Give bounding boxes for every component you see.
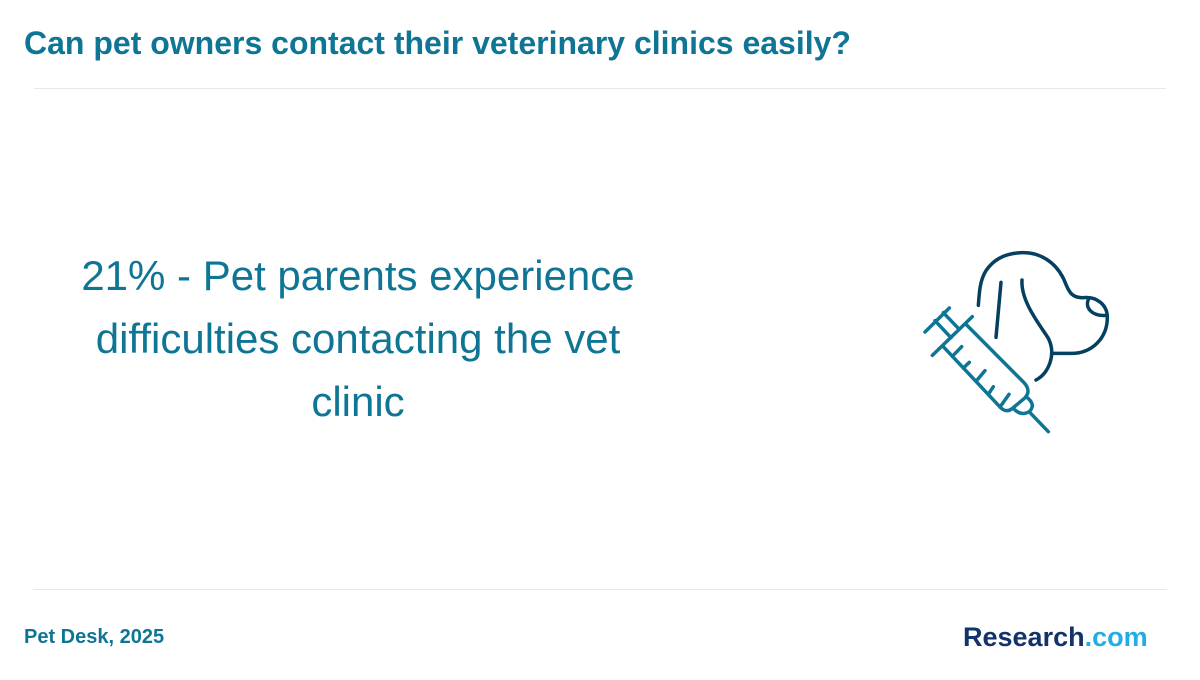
icon part: dog head [978, 253, 1107, 380]
statistic text: difficulties contacting the vet [96, 315, 620, 362]
statistic text: clinic [311, 378, 405, 425]
source: Pet Desk, 2025 [24, 626, 164, 648]
statistic text: 21% - Pet parents experience [81, 252, 635, 299]
icon: dog and syringe [923, 250, 1110, 434]
logo: Research.com: Research.com [963, 622, 1148, 652]
statistic text [81, 252, 635, 425]
icon part: syringe [925, 308, 1048, 432]
title: Can pet owners contact their veterinary clinics easily? [24, 25, 851, 61]
